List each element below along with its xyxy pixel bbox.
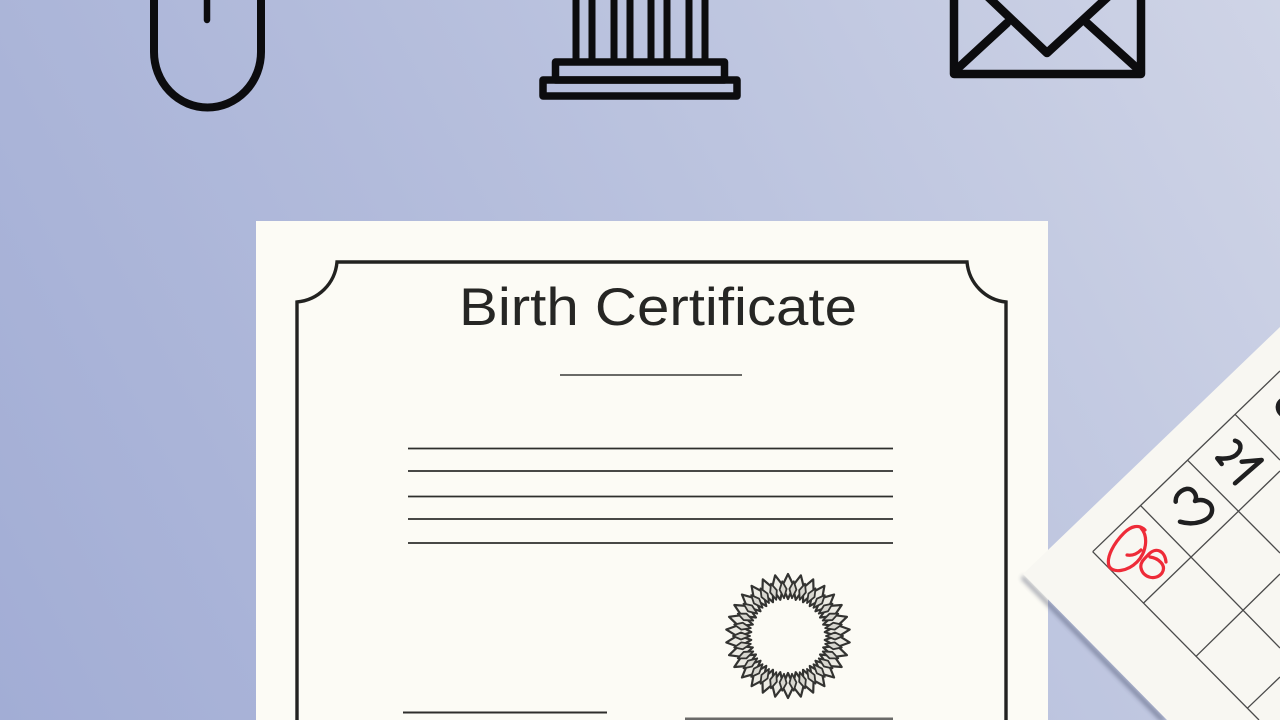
red circled date	[1108, 526, 1166, 578]
handwritten digits two one	[1217, 441, 1262, 483]
date line	[685, 718, 893, 720]
title underline	[560, 374, 742, 376]
body text lines	[408, 448, 893, 543]
seal	[726, 574, 850, 698]
icon: government column	[543, 0, 737, 96]
panel: calendar	[1021, 327, 1280, 720]
partial digit	[1278, 400, 1280, 415]
signature line	[403, 712, 607, 714]
icon: envelope	[954, 0, 1141, 74]
icon: computer mouse	[154, 0, 261, 108]
certificate title: Birth Certificate	[459, 278, 857, 337]
handwritten digit three	[1176, 489, 1212, 523]
calendar grid	[1093, 371, 1280, 720]
certificate border	[297, 262, 1006, 720]
panel: birth certificate	[256, 221, 1048, 720]
